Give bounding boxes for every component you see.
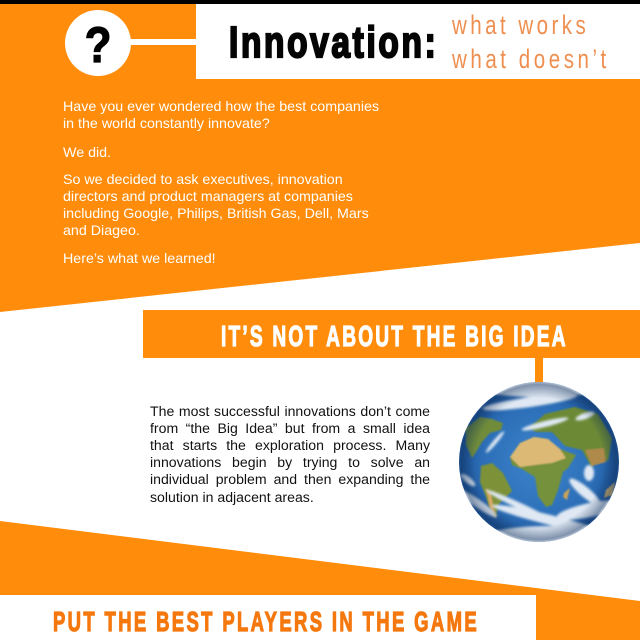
intro text: Have you ever wondered how the best companies — [63, 99, 379, 115]
title: Innovation: Innovation: — [229, 19, 436, 67]
orange lower band — [0, 521, 640, 640]
top black bar — [0, 0, 640, 4]
intro text — [63, 99, 379, 267]
section heading band: big idea — [143, 310, 640, 358]
icon: question mark — [65, 10, 131, 76]
connector line — [128, 39, 196, 45]
big idea body text: from “the Big Idea” but from a small idea — [150, 420, 430, 436]
big idea body text: individual problem and then expanding the — [150, 471, 430, 487]
globe land — [466, 407, 615, 518]
subtitle: what works what doesn't: what works — [451, 10, 586, 41]
intro text: So we decided to ask executives, innovation — [63, 172, 343, 188]
intro text: and Diageo. — [63, 223, 140, 239]
intro text: including Google, Philips, British Gas, Dell, Mars — [63, 206, 369, 222]
icon: question mark: ? — [85, 16, 111, 73]
section heading band: best players — [0, 595, 536, 640]
big idea body text: The most successful innovations don’t come — [150, 403, 430, 419]
header white panel — [196, 4, 640, 79]
big idea body text: that starts the exploration process. Many — [150, 437, 430, 453]
big idea body text — [150, 403, 430, 505]
subtitle: what works what doesn't — [451, 10, 607, 75]
section heading band: big idea: IT’S NOT ABOUT THE BIG IDEA — [221, 321, 566, 353]
orange intro panel — [0, 4, 640, 312]
intro text: We did. — [63, 145, 111, 161]
big idea body text: solution in adjacent areas. — [150, 489, 314, 505]
globe shading — [459, 382, 619, 542]
icon: globe — [455, 381, 625, 544]
section heading band: best players: PUT THE BEST PLAYERS IN THE GAME — [53, 607, 477, 638]
globe clouds — [460, 382, 610, 542]
intro text: in the world constantly innovate? — [63, 116, 270, 132]
subtitle: what works what doesn't: what doesn’t — [451, 44, 607, 75]
connector to globe — [535, 358, 543, 384]
intro text: Here’s what we learned! — [63, 251, 216, 267]
intro text: directors and product managers at companies — [63, 189, 353, 205]
big idea body text: innovations begin by trying to solve an — [150, 454, 430, 470]
